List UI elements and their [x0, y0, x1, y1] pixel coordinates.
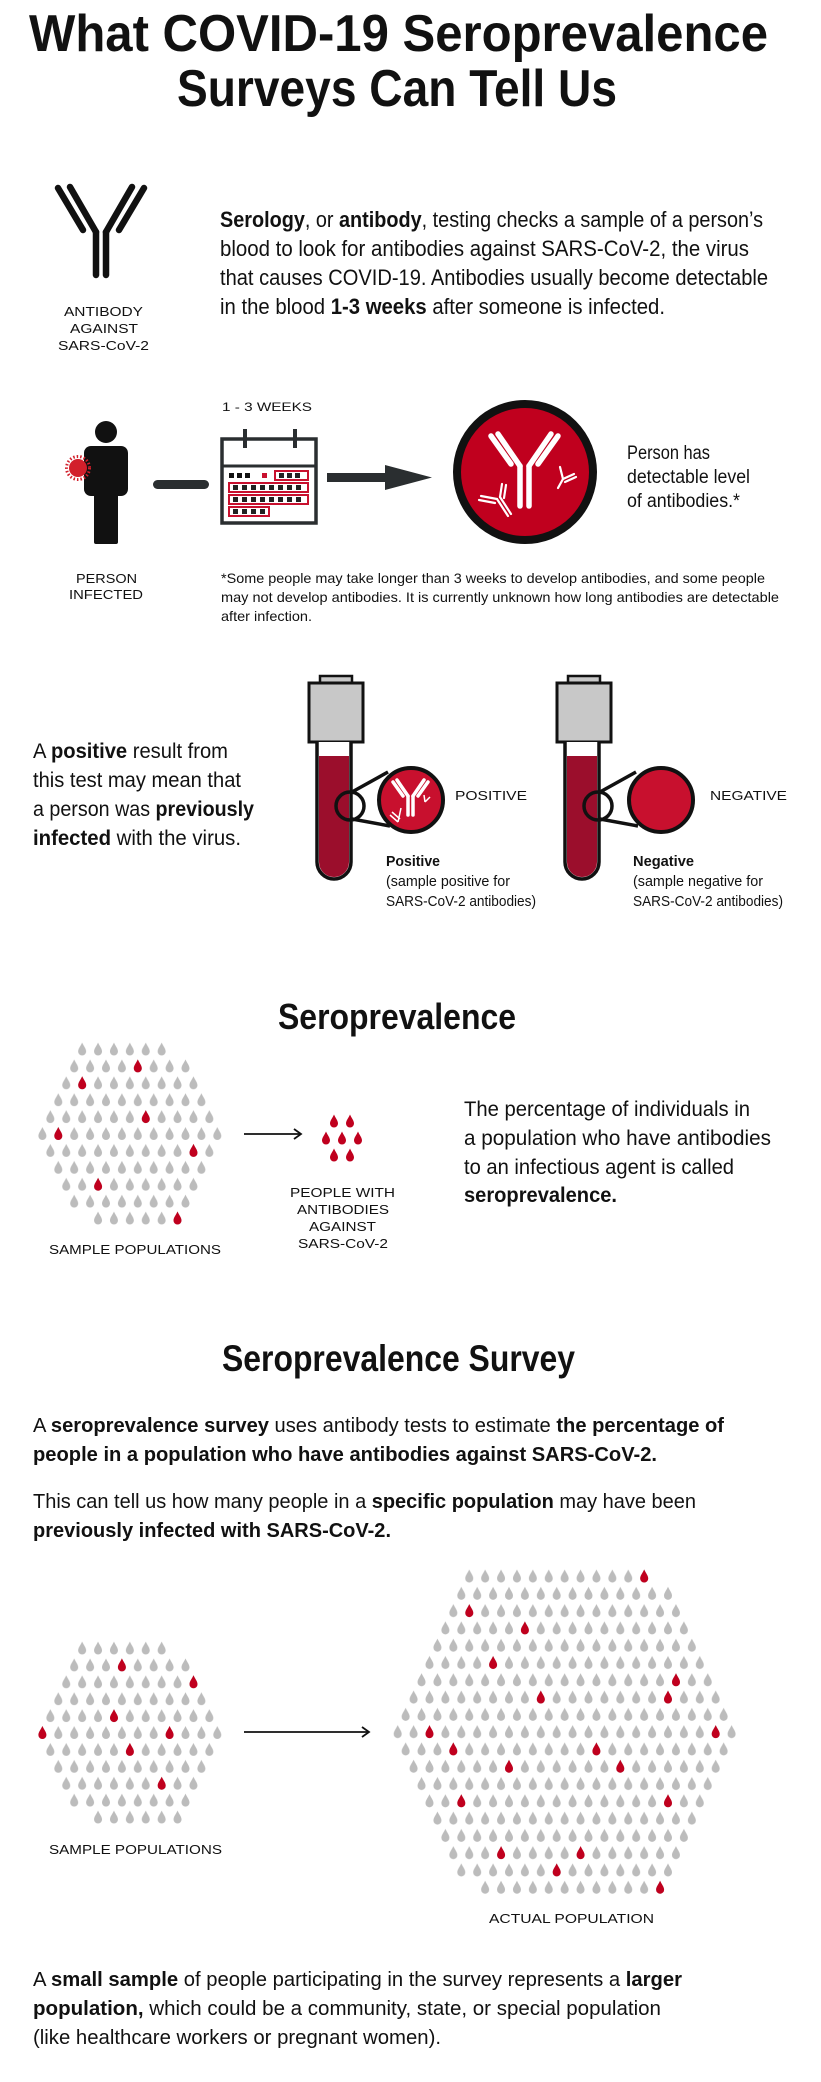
caption: positive: (sample positive for	[386, 873, 510, 890]
text: serology definition: in the blood 1-3 weeks after someone is infected.	[220, 294, 665, 319]
title: Surveys Can Tell Us	[177, 60, 617, 118]
label: person infected	[69, 571, 143, 602]
label: people with antibodies: SARS-CoV-2	[298, 1236, 388, 1251]
heading: seroprevalence survey: Seroprevalence Survey	[222, 1338, 575, 1379]
text: small sample represents larger population	[33, 1969, 682, 2049]
text: person has detectable level: Person has	[627, 443, 710, 464]
text: small sample represents larger population: A small sample of people participating in the survey represents a larger	[33, 1969, 682, 1991]
text: person has detectable level	[627, 443, 750, 512]
text: seroprevalence definition: seroprevalence.	[464, 1184, 617, 1207]
text: seroprevalence definition: The percentage of individuals in	[464, 1098, 750, 1121]
text: person has detectable level: detectable level	[627, 467, 750, 488]
caption: positive	[386, 853, 536, 910]
text: serology definition: blood to look for antibodies against SARS-CoV-2, the virus	[220, 236, 749, 261]
text: serology definition: Serology, or antibody, testing checks a sample of a person’s	[220, 207, 763, 232]
chart: sample population drops	[38, 1042, 222, 1224]
icon: antibody	[58, 187, 144, 275]
chart: sample population drops	[38, 1642, 222, 1824]
icon: positive people drops	[322, 1114, 362, 1162]
label: antibody against SARS-CoV-2: AGAINST	[70, 321, 138, 336]
text: survey definition: A seroprevalence survey uses antibody tests to estimate the percentage of	[33, 1415, 724, 1437]
text: serology definition: that causes COVID-19. Antibodies usually become detectable	[220, 265, 768, 290]
label: antibody against SARS-CoV-2: SARS-CoV-2	[58, 338, 149, 353]
text: seroprevalence definition	[464, 1098, 771, 1207]
chart: actual population drops	[394, 1570, 736, 1894]
text: seroprevalence definition: to an infectious agent is called	[464, 1156, 734, 1179]
label: sample populations: SAMPLE POPULATIONS	[49, 1242, 221, 1257]
label: person infected: PERSON	[76, 571, 137, 586]
label: actual population: ACTUAL POPULATION	[489, 1911, 654, 1926]
text: seroprevalence definition: a population who have antibodies	[464, 1127, 771, 1150]
footnote	[221, 570, 779, 624]
label: people with antibodies: PEOPLE WITH	[290, 1185, 395, 1200]
text: positive result meaning	[33, 740, 254, 850]
label: sample populations: SAMPLE POPULATIONS	[49, 1842, 222, 1857]
text: what it tells us: previously infected with SARS-CoV-2.	[33, 1520, 391, 1542]
title	[29, 5, 768, 118]
label: people with antibodies	[290, 1185, 395, 1251]
caption: positive: SARS-CoV-2 antibodies)	[386, 893, 536, 910]
label: people with antibodies: ANTIBODIES	[297, 1202, 389, 1217]
title: What COVID-19 Seroprevalence	[29, 5, 768, 63]
arrow	[244, 1129, 301, 1139]
caption: negative	[633, 853, 783, 910]
label: antibody against SARS-CoV-2	[58, 304, 149, 353]
icon: negative test tube	[557, 676, 693, 879]
text: positive result meaning: this test may mean that	[33, 769, 241, 792]
label: people with antibodies: AGAINST	[309, 1219, 376, 1234]
icon: calendar	[222, 429, 316, 523]
caption: negative: Negative	[633, 853, 694, 870]
icon: infected person	[66, 421, 128, 544]
text: what it tells us	[33, 1491, 696, 1542]
connector line	[153, 480, 209, 489]
label: positive: POSITIVE	[455, 788, 527, 803]
icon: positive test tube	[309, 676, 443, 879]
text: small sample represents larger population: (like healthcare workers or pregnant women).	[33, 2027, 441, 2049]
heading: seroprevalence: Seroprevalence	[278, 996, 516, 1037]
text: what it tells us: This can tell us how many people in a specific population may have been	[33, 1491, 696, 1513]
text: positive result meaning: infected with the virus.	[33, 827, 241, 850]
arrow	[327, 465, 432, 490]
icon: antibodies in red circle	[457, 404, 593, 540]
arrow	[244, 1727, 369, 1737]
footnote: after infection.	[221, 608, 312, 624]
label: antibody against SARS-CoV-2: ANTIBODY	[64, 304, 143, 319]
caption: positive: Positive	[386, 853, 440, 870]
text: positive result meaning: A positive result from	[33, 740, 228, 763]
text: person has detectable level: of antibodies.*	[627, 491, 741, 512]
text: positive result meaning: a person was previously	[33, 798, 254, 821]
label: person infected: INFECTED	[69, 587, 143, 602]
label: 1-3 weeks: 1 - 3 WEEKS	[222, 400, 312, 414]
caption: negative: SARS-CoV-2 antibodies)	[633, 893, 783, 910]
footnote: *Some people may take longer than 3 weeks to develop antibodies, and some people	[221, 570, 765, 586]
text: survey definition: people in a population who have antibodies against SARS-CoV-2.	[33, 1444, 657, 1466]
text: small sample represents larger population: population, which could be a community, state, or special population	[33, 1998, 661, 2020]
caption: negative: (sample negative for	[633, 873, 763, 890]
label: negative: NEGATIVE	[710, 788, 787, 803]
footnote: may not develop antibodies. It is currently unknown how long antibodies are detectable	[221, 589, 779, 605]
text: survey definition	[33, 1415, 724, 1466]
text: serology definition	[220, 207, 768, 319]
